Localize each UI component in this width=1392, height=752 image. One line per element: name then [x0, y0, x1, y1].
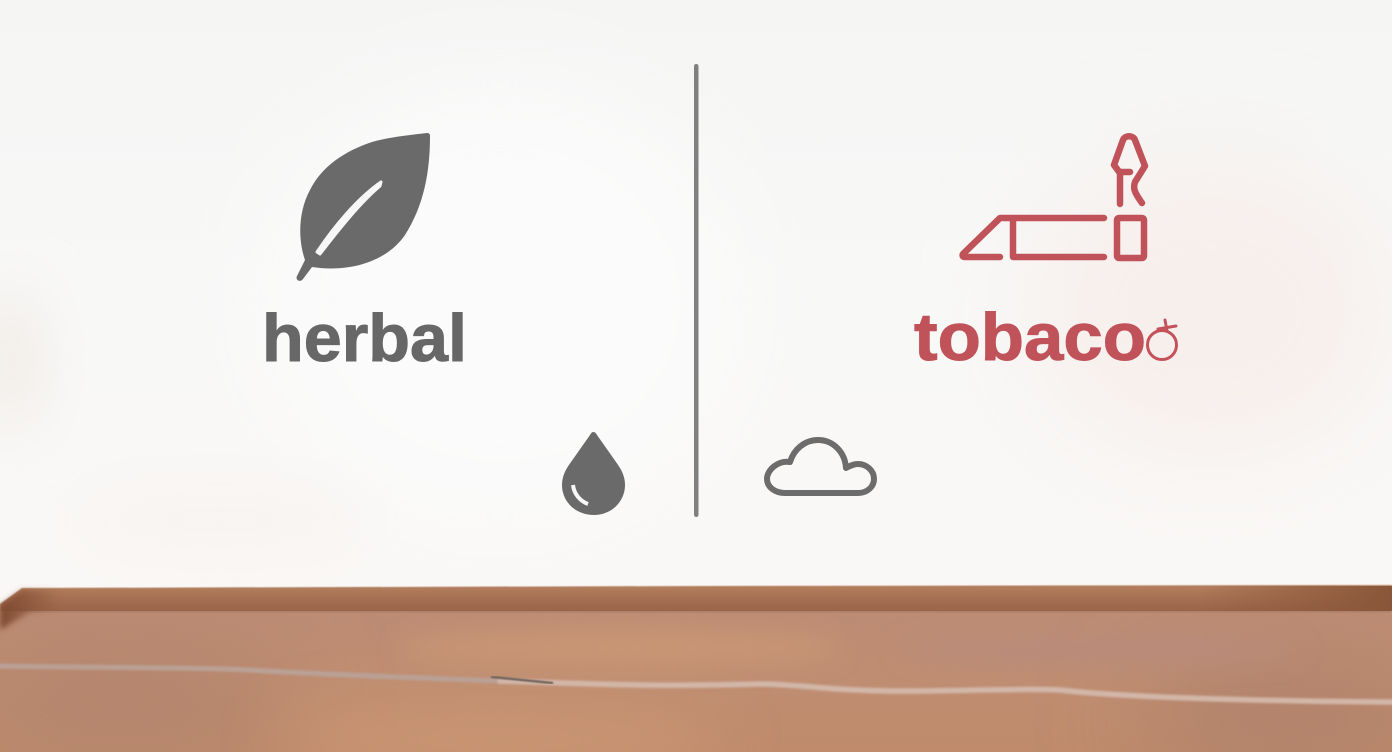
herbal label: herbal [262, 301, 467, 376]
table surface [0, 612, 1392, 752]
white cable [0, 666, 1392, 702]
tobacco label: tobaco [914, 300, 1146, 375]
wooden table [0, 585, 1392, 752]
cigarette body [963, 218, 1104, 257]
icon: leaf [297, 133, 430, 281]
panel: tobacco [914, 136, 1176, 375]
icon: cloud [767, 440, 874, 493]
icon: fruit-shaped letter o [1148, 320, 1176, 360]
smoke [1114, 136, 1145, 204]
central divider [694, 64, 698, 517]
cigarette filter [1117, 218, 1144, 258]
icon: water drop [562, 432, 625, 515]
table back rim [0, 585, 1392, 612]
icon: cigarette with smoke [963, 136, 1145, 258]
panel: herbal [262, 133, 467, 376]
wall background [0, 0, 1392, 600]
